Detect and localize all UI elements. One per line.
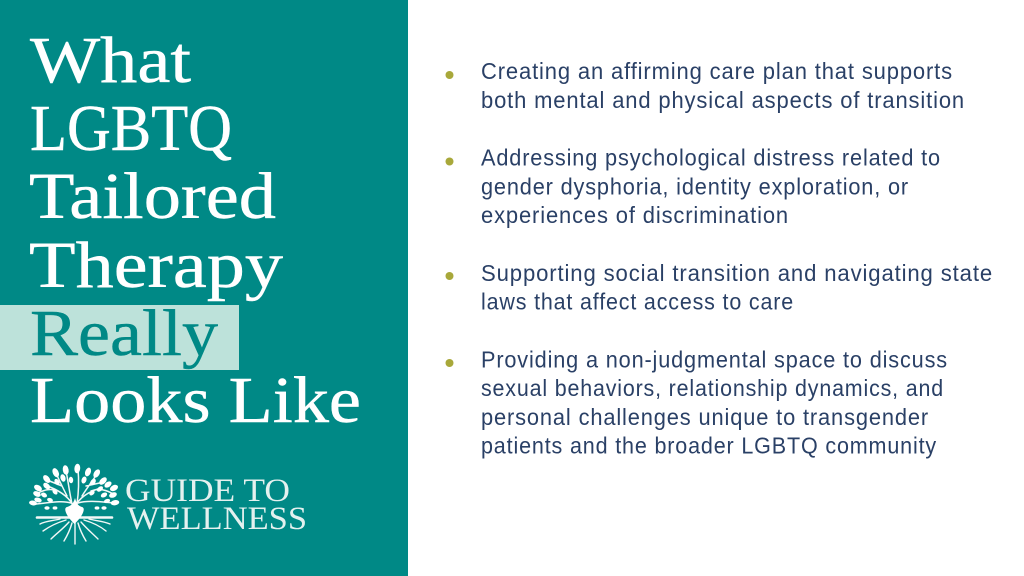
- bullet list: [446, 58, 993, 458]
- bullet 4: Providing a non-judgmental space to discuss: [481, 346, 948, 372]
- bullet 3: Supporting social transition and navigating state: [481, 260, 993, 286]
- bullet 1: both mental and physical aspects of transition: [481, 87, 965, 113]
- title: [29, 24, 361, 437]
- bullet 4: personal challenges unique to transgender: [481, 404, 929, 430]
- bullet 4: sexual behaviors, relationship dynamics, and: [481, 375, 944, 401]
- leaves: [29, 463, 120, 510]
- bullet 3: laws that affect access to care: [481, 288, 794, 314]
- bullet 2: gender dysphoria, identity exploration, or: [481, 174, 909, 200]
- bullet 1: [446, 58, 965, 113]
- panel: teal title panel: [0, 0, 408, 576]
- logo wordmark: WELLNESS: [127, 501, 307, 537]
- bullet 4: patients and the broader LGBTQ community: [481, 432, 937, 458]
- logo wordmark: GUIDE TO: [125, 473, 290, 509]
- heart trunk: [65, 498, 84, 524]
- logo: Guide to Wellness: [29, 463, 307, 544]
- bullet 2: experiences of discrimination: [481, 202, 789, 228]
- icon: tree with heart and roots: [29, 463, 120, 544]
- bullet 2: [446, 144, 941, 228]
- bullet 2: Addressing psychological distress related to: [481, 144, 941, 170]
- bullet 3: [446, 260, 993, 314]
- title: What: [30, 24, 191, 97]
- logo wordmark: [125, 473, 307, 537]
- title: Really: [30, 297, 218, 370]
- bullet 4: [446, 346, 948, 458]
- highlight band behind Really: [0, 305, 239, 370]
- title: Therapy: [29, 229, 283, 302]
- title: LGBTQ: [30, 92, 232, 165]
- bullet 1: Creating an affirming care plan that supports: [481, 58, 953, 84]
- title: Looks Like: [30, 364, 361, 437]
- title: Tailored: [29, 160, 276, 233]
